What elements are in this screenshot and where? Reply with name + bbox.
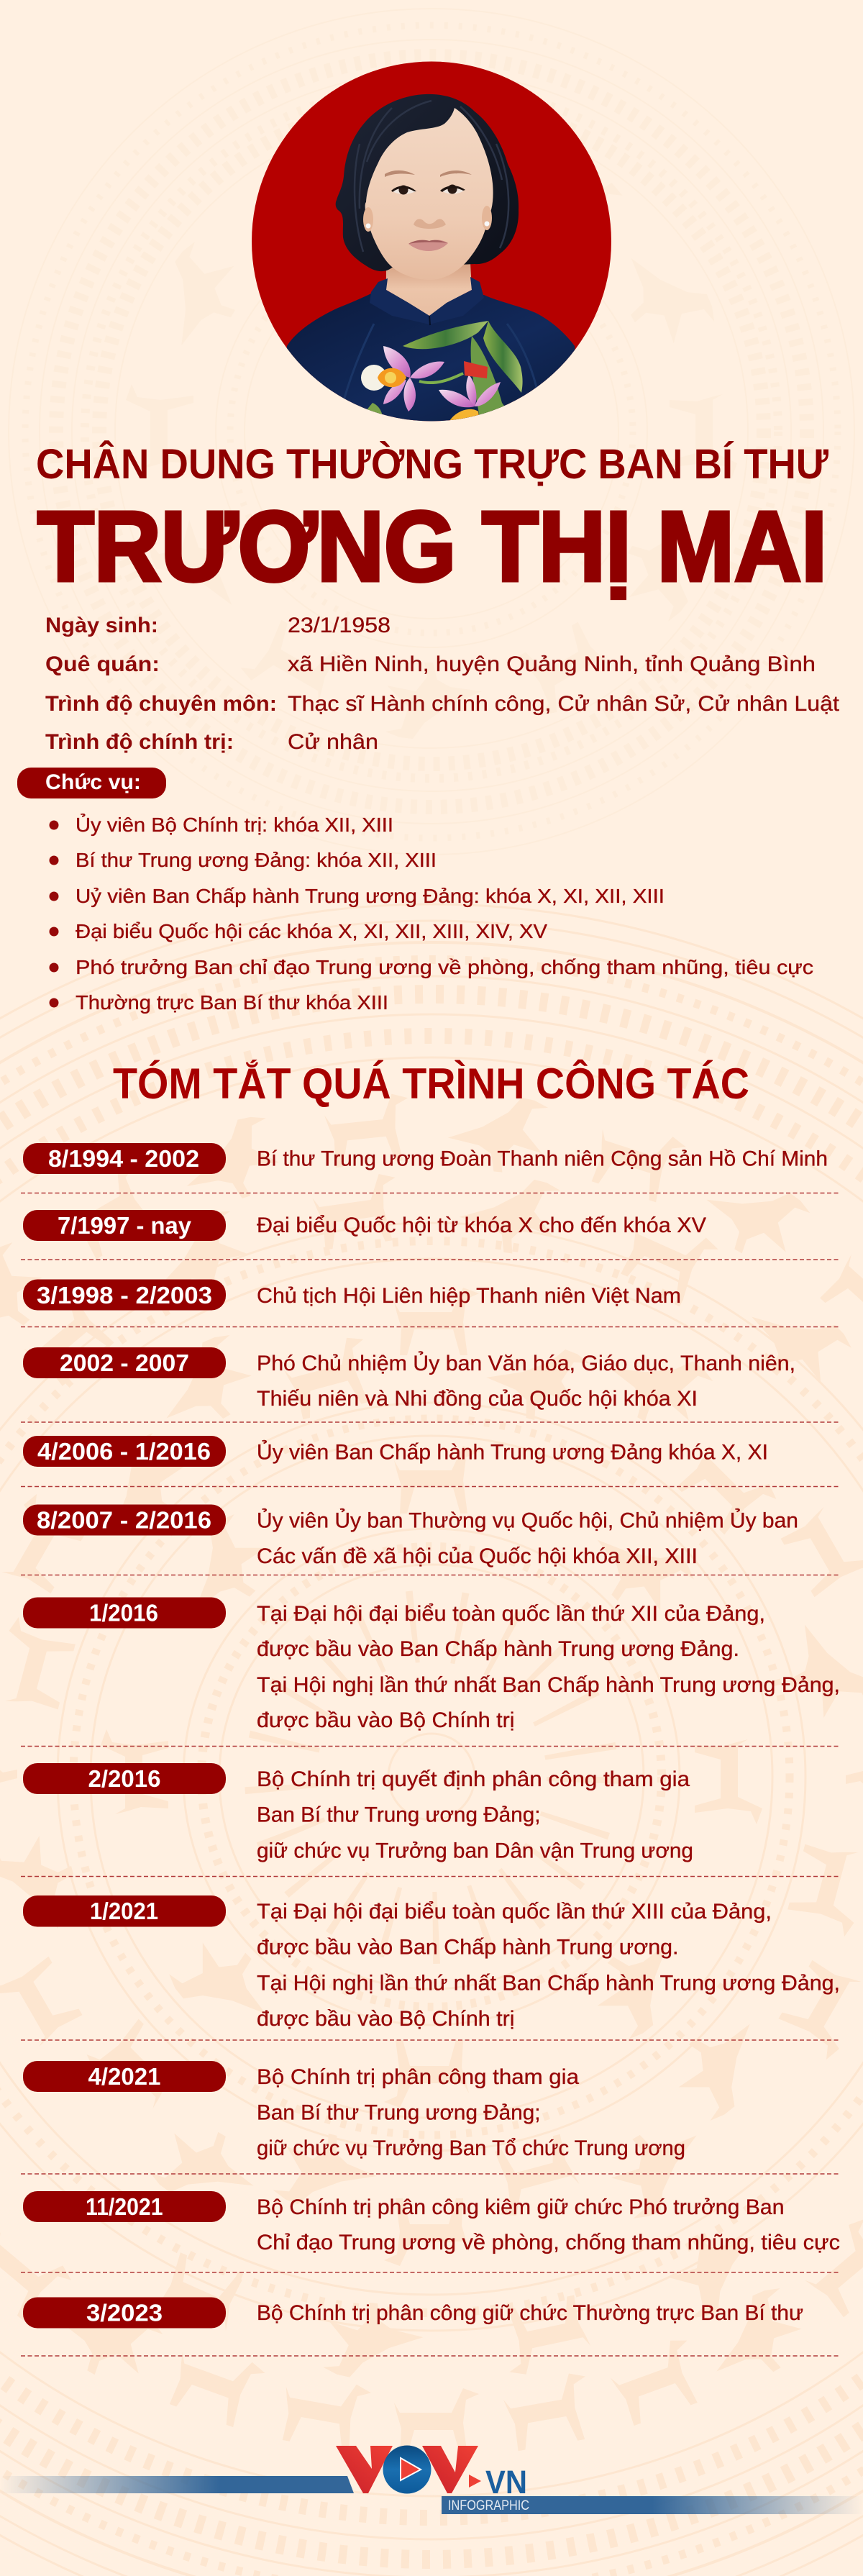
entry: 2/2016: 2/2016: [88, 1765, 161, 1792]
hometown: [45, 652, 816, 676]
political qualification: Cử nhân: [288, 730, 378, 754]
entry: 3/1998 - 2/2003: 3/1998 - 2/2003: [37, 1282, 212, 1309]
footer: VOV.VN infographic logo: [0, 2446, 863, 2514]
entry: 2/2016: Bộ Chính trị quyết định phân công tham gia: [257, 1767, 690, 1791]
entry: 8/1994 - 2002: 8/1994 - 2002: [48, 1145, 199, 1172]
positions list: [49, 813, 813, 1014]
entry: 4/2021: Ban Bí thư Trung ương Đảng;: [257, 2101, 541, 2125]
entry: 4/2006 - 1/2016: 4/2006 - 1/2016: [37, 1438, 211, 1465]
personal information block: [45, 614, 840, 754]
entry: 8/2007 - 2/2016: Ủy viên Ủy ban Thường vụ Quốc hội, Chủ nhiệm Ủy ban: [257, 1508, 798, 1532]
entry: 3/2023: 3/2023: [86, 2299, 163, 2326]
entry: 11/2021: Bộ Chính trị phân công kiêm giữ chức Phó trưởng Ban: [257, 2195, 784, 2219]
positions list: Thường trực Ban Bí thư khóa XIII: [76, 991, 388, 1014]
heading: career summary: TÓM TẮT QUÁ TRÌNH CÔNG TÁC: [113, 1060, 749, 1108]
political qualification: [45, 730, 378, 754]
entry: 2002 - 2007: [23, 1347, 795, 1411]
collar: [370, 277, 484, 324]
entry: 1/2021: Tại Đại hội đại biểu toàn quốc lần thứ XIII của Đảng,: [257, 1900, 772, 1924]
entry: 4/2021: giữ chức vụ Trưởng Ban Tổ chức Trung ương: [257, 2136, 685, 2160]
entry: 1/2021: 1/2021: [90, 1898, 158, 1924]
timeline: [21, 1143, 840, 2356]
entry: 2/2016: Ban Bí thư Trung ương Đảng;: [257, 1803, 541, 1827]
entry: 1/2021: Tại Hội nghị lần thứ nhất Ban Chấp hành Trung ương Đảng,: [257, 1971, 840, 1995]
date of birth: [45, 614, 391, 637]
entry: 4/2006 - 1/2016: Ủy viên Ban Chấp hành Trung ương Đảng khóa X, XI: [257, 1440, 768, 1465]
photo of Trương Thị Mai: [280, 94, 583, 432]
entry: 2002 - 2007: Phó Chủ nhiệm Ủy ban Văn hóa, Giáo dục, Thanh niên,: [257, 1351, 795, 1375]
political qualification: Trình độ chính trị:: [45, 730, 234, 754]
entry: 1/2016: [23, 1597, 840, 1732]
entry: 8/1994 - 2002: Bí thư Trung ương Đoàn Thanh niên Cộng sản Hồ Chí Minh: [257, 1147, 828, 1171]
entry: 7/1997 - nay: 7/1997 - nay: [58, 1212, 192, 1239]
entry: 2002 - 2007: Thiếu niên và Nhi đồng của Quốc hội khóa XI: [257, 1387, 698, 1411]
entry: 11/2021: 11/2021: [86, 2193, 163, 2220]
positions heading pill: [17, 768, 166, 798]
embroidered leaves: [367, 321, 523, 414]
entry: 1/2016: được bầu vào Ban Chấp hành Trung ương Đảng.: [257, 1637, 739, 1661]
entry: 8/2007 - 2/2016: [23, 1505, 798, 1568]
entry: 8/2007 - 2/2016: Các vấn đề xã hội của Quốc hội khóa XII, XIII: [257, 1544, 698, 1568]
entry: 8/1994 - 2002: [23, 1143, 828, 1174]
right blue bar: [442, 2496, 863, 2514]
professional qualification: Trình độ chuyên môn:: [45, 692, 277, 716]
name: Trương Thị Mai: TRƯƠNG THỊ MAI: [37, 491, 827, 602]
orchid flower right: [439, 376, 501, 420]
positions list: Bí thư Trung ương Đảng: khóa XII, XIII: [76, 849, 437, 871]
VOV mark: [336, 2446, 481, 2493]
red circle backdrop: [252, 62, 611, 422]
entry: 4/2021: 4/2021: [88, 2063, 161, 2090]
entry: 4/2021: [23, 2061, 685, 2160]
professional qualification: Thạc sĩ Hành chính công, Cử nhân Sử, Cử nhân Luật: [288, 692, 840, 716]
entry: 1/2016: 1/2016: [89, 1600, 158, 1626]
VN wordmark: VN: [485, 2464, 527, 2500]
positions list: Đại biểu Quốc hội các khóa X, XI, XII, XIII, XIV, XV: [76, 920, 547, 942]
party flag pin: [464, 361, 488, 378]
positions list: Uỷ viên Ban Chấp hành Trung ương Đảng: khóa X, XI, XII, XIII: [76, 885, 665, 907]
date of birth: Ngày sinh:: [45, 614, 158, 637]
entry: 1/2021: [23, 1895, 840, 2031]
portrait: [252, 62, 611, 432]
date of birth: 23/1/1958: [288, 614, 391, 637]
entry: 8/2007 - 2/2016: 8/2007 - 2/2016: [37, 1506, 211, 1534]
entry: 4/2006 - 1/2016: [23, 1436, 768, 1467]
hometown: Quê quán:: [45, 652, 160, 676]
entry: 4/2021: Bộ Chính trị phân công tham gia: [257, 2065, 579, 2089]
left blue bar: [0, 2476, 354, 2493]
entry: 2/2016: [23, 1763, 693, 1863]
entry: 11/2021: Chỉ đạo Trung ương về phòng, chống tham nhũng, tiêu cực: [257, 2231, 840, 2254]
hometown: xã Hiền Ninh, huyện Quảng Ninh, tỉnh Quảng Bình: [288, 652, 816, 676]
entry: 7/1997 - nay: [23, 1210, 706, 1241]
entry: 11/2021: [23, 2191, 840, 2254]
orchid flower left: [361, 346, 444, 411]
entry: 7/1997 - nay: Đại biểu Quốc hội từ khóa X cho đến khóa XV: [257, 1214, 706, 1237]
entry: 2/2016: giữ chức vụ Trưởng ban Dân vận Trung ương: [257, 1839, 693, 1863]
entry: 3/1998 - 2/2003: [23, 1279, 681, 1311]
positions list: Phó trưởng Ban chỉ đạo Trung ương về phòng, chống tham nhũng, tiêu cực: [76, 956, 813, 978]
entry: 1/2021: được bầu vào Ban Chấp hành Trung ương.: [257, 1935, 679, 1960]
professional qualification: [45, 692, 840, 716]
entry: 3/1998 - 2/2003: Chủ tịch Hội Liên hiệp Thanh niên Việt Nam: [257, 1284, 681, 1308]
entry: 2002 - 2007: 2002 - 2007: [60, 1350, 189, 1376]
entry: 1/2016: được bầu vào Bộ Chính trị: [257, 1708, 515, 1732]
title: Chân dung Thường trực Ban Bí thư: CHÂN DUNG THƯỜNG TRỰC BAN BÍ THƯ: [36, 441, 829, 488]
positions heading pill: Chức vụ:: [45, 770, 141, 794]
entry: 1/2016: Tại Hội nghị lần thứ nhất Ban Chấp hành Trung ương Đảng,: [257, 1673, 840, 1697]
infographic label: INFOGRAPHIC: [448, 2498, 529, 2513]
entry: 3/2023: Bộ Chính trị phân công giữ chức Thường trực Ban Bí thư: [257, 2301, 803, 2325]
entry: 1/2016: Tại Đại hội đại biểu toàn quốc lần thứ XII của Đảng,: [257, 1602, 765, 1626]
entry: 1/2021: được bầu vào Bộ Chính trị: [257, 2007, 515, 2031]
positions list: Ủy viên Bộ Chính trị: khóa XII, XIII: [76, 813, 393, 836]
entry: 3/2023: [23, 2298, 803, 2328]
